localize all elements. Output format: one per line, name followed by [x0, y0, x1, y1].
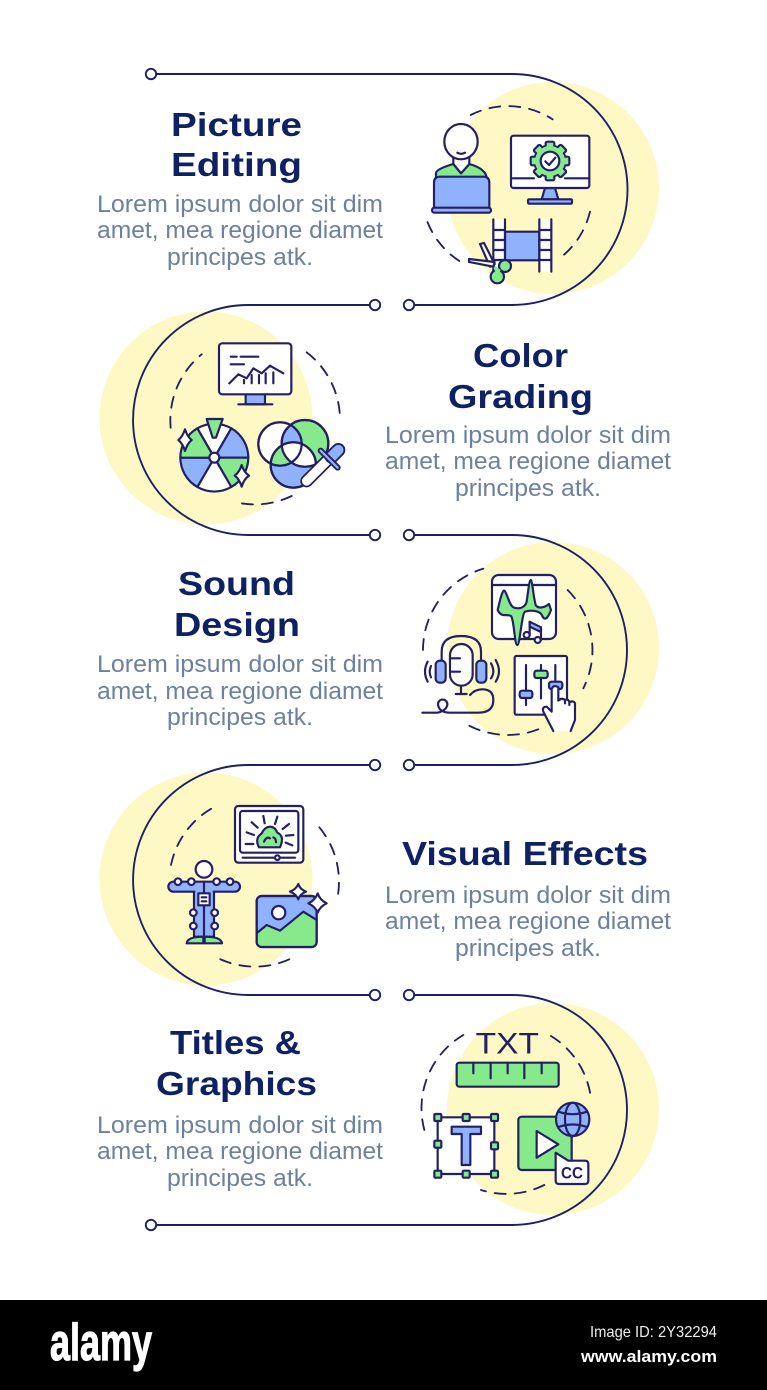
body text: principes atk.: [455, 475, 601, 502]
body text: amet, mea regione diamet: [97, 678, 383, 705]
icon: film strip and scissors: [469, 219, 551, 283]
heading: Editing: [171, 146, 302, 183]
body text: Lorem ipsum dolor sit dim: [97, 1112, 383, 1139]
footer band: [0, 1300, 767, 1390]
connector line: [133, 69, 627, 1230]
heading: Design: [174, 606, 300, 643]
body text: amet, mea regione diamet: [385, 908, 671, 935]
dashed ring: [170, 352, 340, 504]
icon: person at laptop: [432, 124, 491, 213]
body text: [385, 422, 671, 502]
body text: [97, 651, 383, 731]
heading: Grading: [448, 378, 593, 415]
body text: principes atk.: [167, 244, 313, 271]
body text: principes atk.: [455, 935, 601, 962]
icon: color wheel: [178, 419, 249, 492]
icon: text box with handles: [434, 1114, 498, 1178]
heading: Titles &: [170, 1024, 301, 1061]
heading: [448, 337, 593, 415]
dashed ring: [423, 569, 592, 735]
heading: [174, 565, 300, 643]
body text: principes atk.: [167, 704, 313, 731]
heading: [156, 1024, 317, 1102]
heading: [171, 106, 302, 183]
body text: Lorem ipsum dolor sit dim: [97, 191, 383, 218]
icon: motion capture figure: [168, 861, 240, 943]
yellow circle backdrops: [100, 82, 659, 1215]
icon group: sound design: [422, 569, 592, 735]
heading: Color: [473, 337, 568, 374]
icon: picture with sparkles: [257, 884, 327, 948]
panel: titles and graphics text: [97, 1024, 383, 1192]
logo: alamy: [50, 1314, 152, 1372]
dashed ring: [421, 1035, 590, 1194]
icon group: titles and graphics: [421, 1027, 590, 1194]
icon: microphone with headphones: [422, 636, 499, 713]
heading: Picture: [171, 106, 302, 143]
icon: video with globe and captions: [518, 1103, 589, 1184]
icon: ruler: [457, 1063, 559, 1087]
icon group: picture editing: [427, 106, 590, 283]
icon group: visual effects: [168, 805, 339, 967]
icon: monitor with gear: [511, 136, 589, 204]
label: TXT: TXT: [476, 1027, 539, 1060]
icon: venn diagram and dropper: [258, 420, 338, 488]
panel: visual effects text: [385, 835, 671, 962]
panel: color grading text: [385, 337, 671, 502]
image id: Image ID: 2Y32294: [590, 1324, 717, 1341]
dashed ring: [427, 106, 590, 261]
heading: Graphics: [156, 1065, 317, 1102]
panel: picture editing text: [97, 106, 383, 271]
icon group: color grading: [170, 343, 340, 504]
body text: amet, mea regione diamet: [97, 1138, 383, 1165]
icon: video with globe and captions: CC: [561, 1164, 583, 1183]
icon: tablet with explosion: [235, 806, 303, 863]
dashed ring: [171, 805, 339, 967]
body text: amet, mea regione diamet: [385, 448, 671, 475]
body text: Lorem ipsum dolor sit dim: [385, 422, 671, 449]
heading: Visual Effects: [402, 835, 648, 872]
panel: sound design text: [97, 565, 383, 731]
body text: Lorem ipsum dolor sit dim: [97, 651, 383, 678]
body text: [97, 1112, 383, 1192]
icon: monitor with chart: [219, 343, 291, 404]
icon: mixer with hand: [515, 656, 575, 731]
heading: Sound: [178, 565, 295, 602]
body text: principes atk.: [167, 1165, 313, 1192]
body text: [97, 191, 383, 271]
body text: Lorem ipsum dolor sit dim: [385, 882, 671, 909]
website: www.alamy.com: [580, 1347, 717, 1366]
body text: amet, mea regione diamet: [97, 217, 383, 244]
icon: waveform window with music note: [492, 575, 556, 645]
body text: [385, 882, 671, 962]
